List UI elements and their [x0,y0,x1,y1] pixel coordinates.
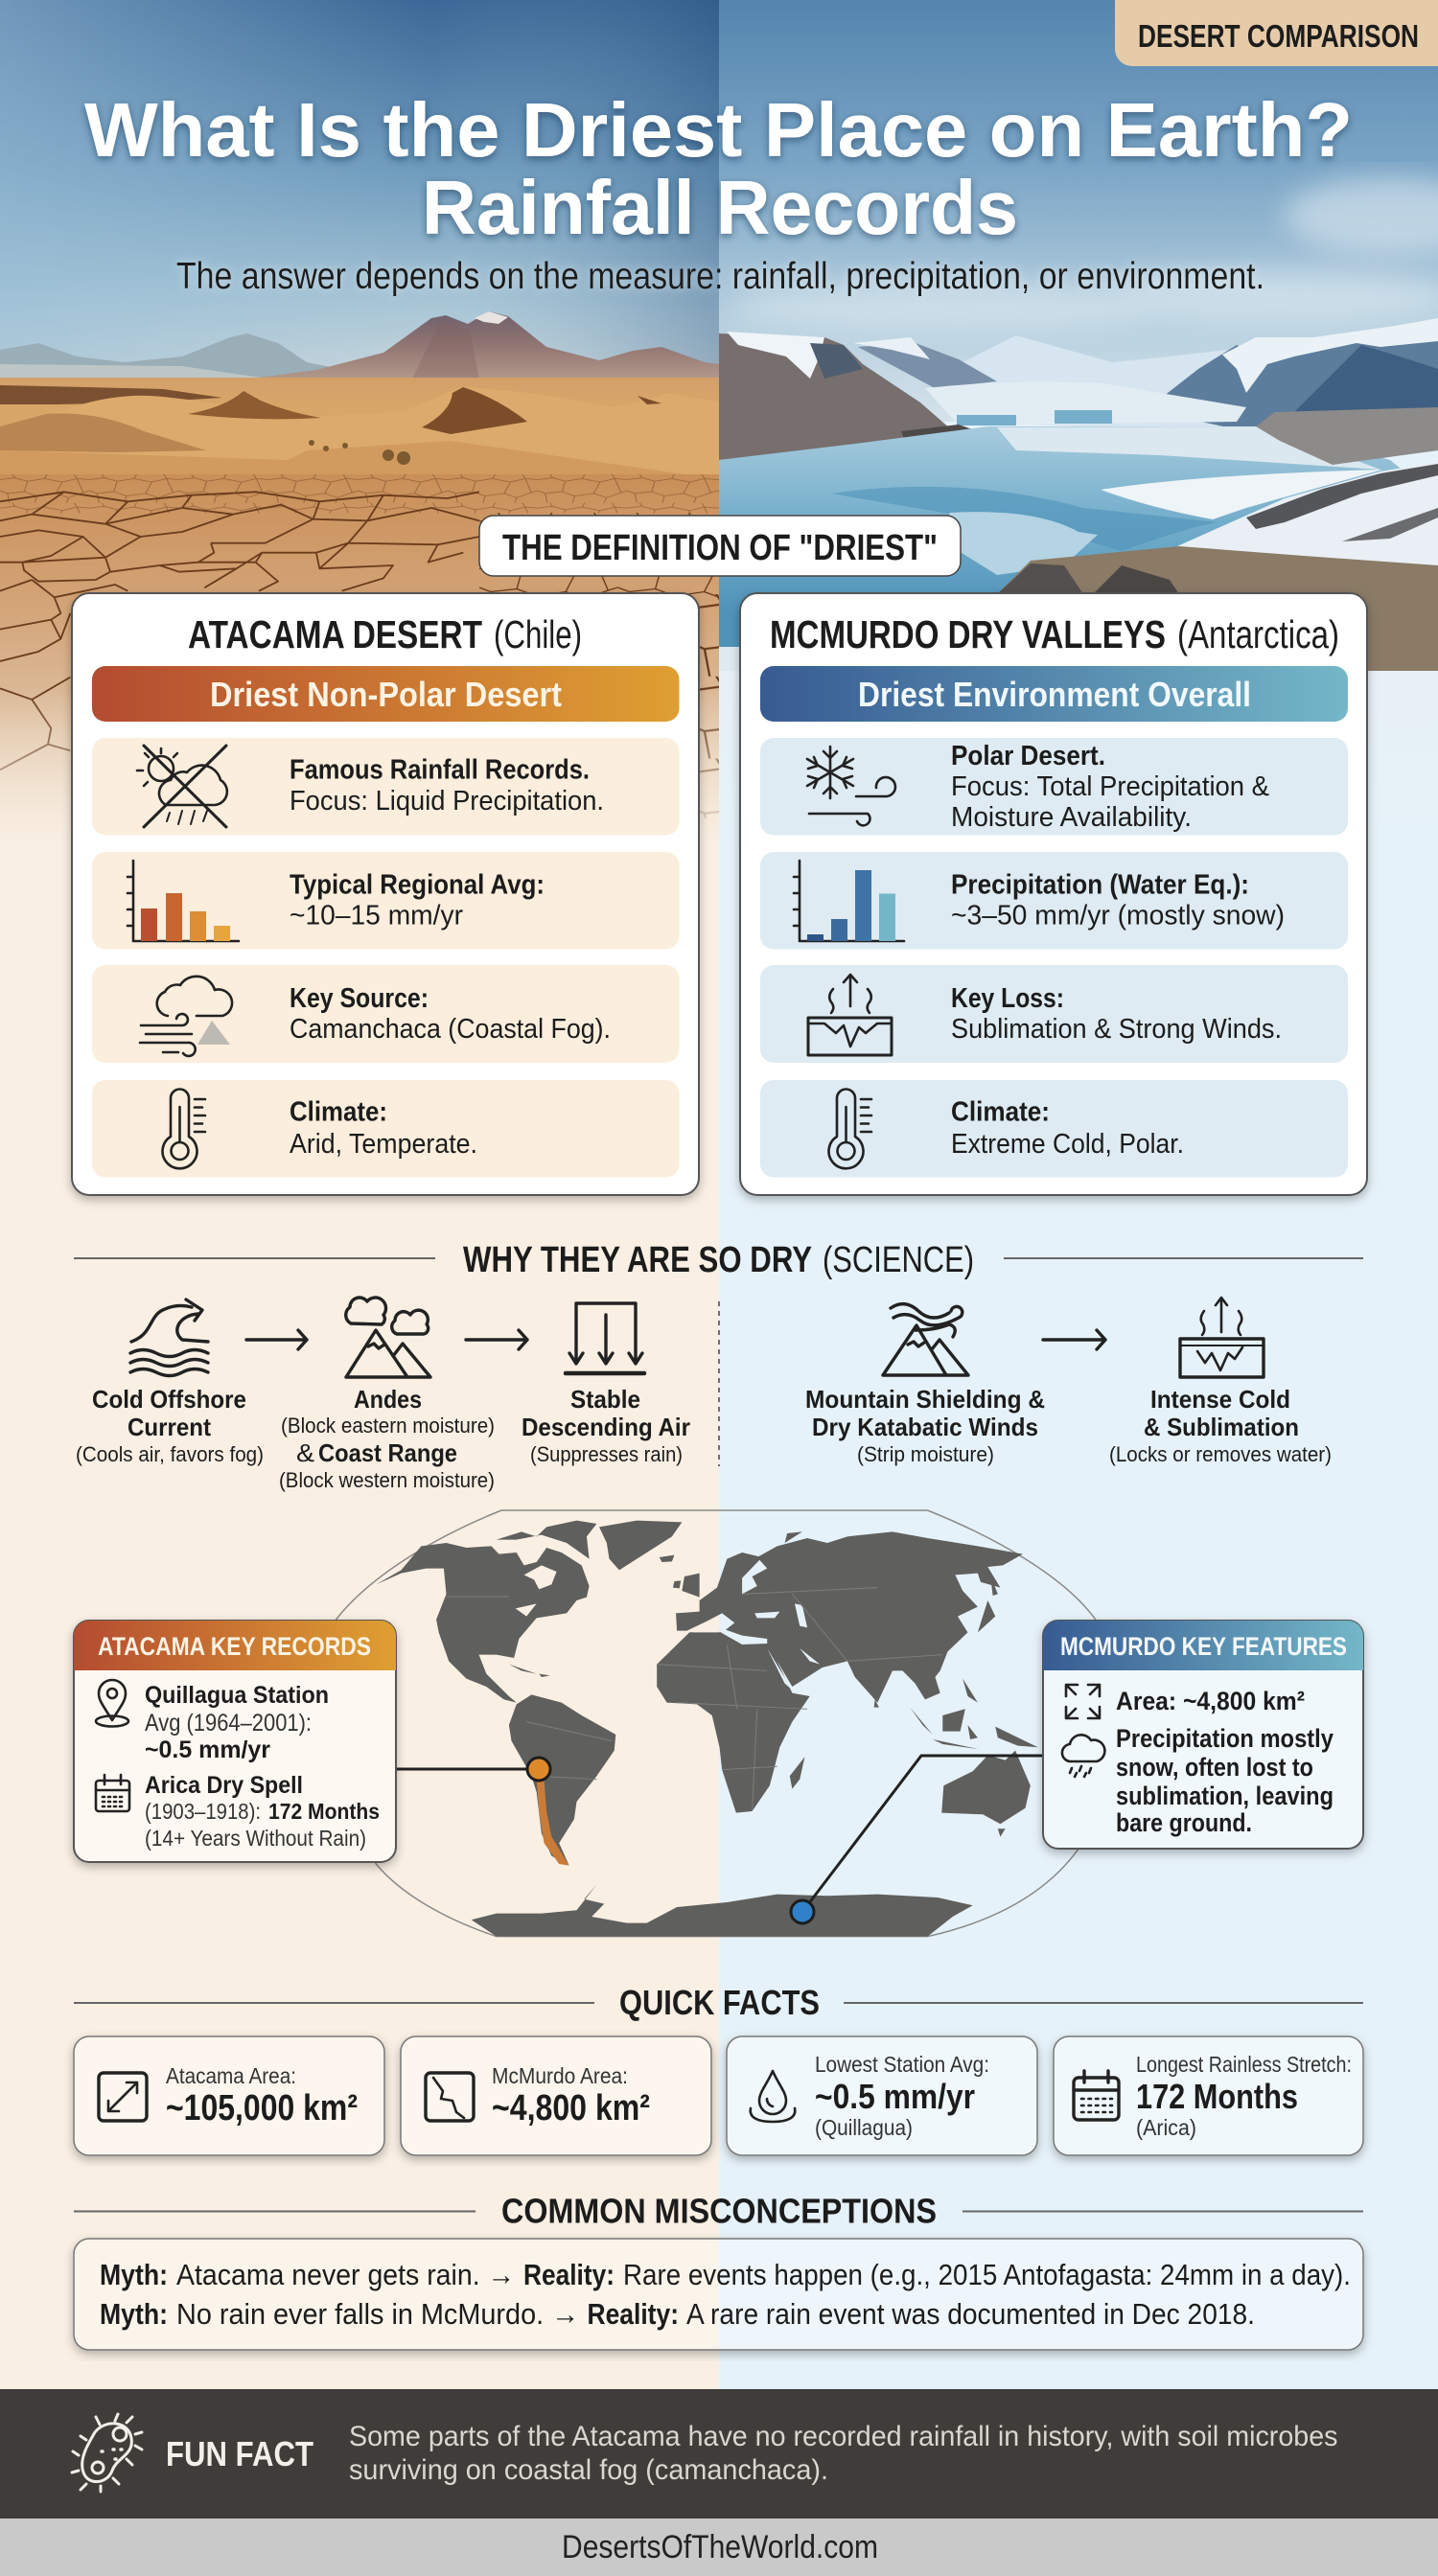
text: fun fact: Some parts of the Atacama have no recorded rainfall in history, with soil microbes [349,2421,1338,2452]
text: Quillagua station: Avg (1964–2001): [145,1710,312,1736]
icon: thermometer polar [828,1089,871,1168]
band: fun fact [0,2389,1438,2518]
row: key loss [760,965,1348,1063]
text: polar desert: Moisture Availability. [951,802,1192,833]
section heading: common misconceptions: COMMON MISCONCEPTIONS [501,2191,937,2231]
row: key source [92,965,679,1063]
step: cold offshore current: Current [128,1413,211,1441]
text: regional average: Typical Regional Avg: [290,870,545,901]
step: stable descending air: Stable [570,1385,640,1414]
row: rainfall records [92,738,679,836]
footer: DesertsOfTheWorld.com [562,2529,878,2565]
myth one: Atacama never gets rain. → [176,2258,515,2291]
text: lowest station average [815,2052,989,2140]
text: regional average: ~10–15 mm/yr [290,901,463,932]
step: andes and coast range: (Block western moisture) [279,1468,495,1492]
step: andes and coast range: & [296,1438,314,1467]
step: andes and coast range: Coast Range [318,1438,457,1467]
text: key source: Key Source: [290,983,429,1014]
panel: misconceptions [74,2239,1363,2350]
text: Atacama area [166,2063,358,2128]
step: mountain shielding: Dry Katabatic Winds [812,1413,1038,1441]
icon: bar chart cool [794,861,904,941]
section heading: why they are so dry: (SCIENCE) [823,1240,974,1280]
text: precipitation: Precipitation (Water Eq.): [951,870,1249,901]
panel: McMurdo Dry Valleys [740,593,1367,1195]
myth two: Reality: [587,2297,679,2331]
text: climate polar: Extreme Cold, Polar. [951,1129,1184,1160]
arrow [246,1330,307,1349]
text: rainfall records: Focus: Liquid Precipitation. [290,786,604,816]
icon: expand arrows [1066,1685,1100,1718]
panel heading: McMurdo: (Antarctica) [1177,612,1339,656]
text: rainfall records: Famous Rainfall Records. [290,755,590,786]
text: precipitation note [1116,1724,1334,1837]
highlight: Chile strip [537,1780,569,1866]
myth one: Reality: [523,2258,615,2291]
tag: desert comparison [1115,0,1438,66]
stat card: lowest station average [727,2036,1037,2155]
text: longest rainless stretch: Longest Rainless Stretch: [1136,2052,1352,2077]
text: polar desert [951,741,1269,833]
connector: Atacama marker [396,1758,550,1781]
heading pill: the definition of driest [479,516,961,576]
text: key source [290,983,611,1045]
text: Arica dry spell [145,1772,380,1851]
text: key loss: Key Loss: [951,983,1064,1014]
myth two: Myth: [100,2297,168,2331]
stat card: longest rainless stretch [1054,2036,1363,2155]
text: polar desert: Focus: Total Precipitation & [951,771,1269,802]
text: Quillagua station: Quillagua Station [145,1682,329,1709]
callout: Atacama key records [74,1621,396,1862]
myth one: Rare events happen (e.g., 2015 Antofagasta: 24mm in a day). [623,2258,1351,2291]
step: andes and coast range: (Block eastern moisture) [281,1414,495,1438]
text: climate [290,1096,477,1160]
icon: calendar [1074,2071,1119,2120]
section heading: why they are so dry [74,1240,1363,1280]
step: cold offshore current: (Cools air, favors fog) [76,1442,264,1466]
section heading: quick facts: QUICK FACTS [619,1983,820,2022]
footer [0,2518,1438,2576]
title: What Is the Driest Place on Earth? [84,87,1353,172]
icon: mountain and katabatic winds [883,1304,968,1375]
banner: driest non-polar desert: Driest Non-Polar Desert [210,675,562,714]
icon: microbe [72,2414,142,2492]
step: stable descending air [522,1385,690,1466]
arrow [1043,1330,1105,1349]
text: fun fact [349,2421,1338,2486]
icon: bar chart warm [128,861,239,941]
icon: wave [130,1300,208,1376]
step: intense cold: (Locks or removes water) [1109,1442,1332,1466]
stat card: McMurdo area [401,2036,711,2155]
text: lowest station average: (Quillagua) [815,2115,913,2140]
text: Quillagua station: ~0.5 mm/yr [145,1736,270,1763]
flow: McMurdo science steps [805,1298,1332,1466]
text: precipitation note: sublimation, leaving [1116,1782,1334,1810]
text: climate polar [951,1096,1184,1160]
step: cold offshore current [76,1385,264,1466]
panel heading: Atacama: (Chile) [494,612,582,656]
icon: descending air [566,1303,644,1373]
banner: driest environment overall: Driest Environment Overall [858,675,1251,714]
text: key loss [951,983,1282,1045]
label: fun fact: FUN FACT [166,2434,313,2473]
stat card: Atacama area [74,2036,384,2155]
banner: driest environment overall [760,666,1348,722]
text: regional average [290,870,545,932]
row: precipitation [760,852,1348,949]
text: polar desert: Polar Desert. [951,741,1105,771]
callout header: ATACAMA KEY RECORDS [98,1632,371,1661]
callout header [74,1621,396,1670]
text: precipitation: ~3–50 mm/yr (mostly snow) [951,901,1285,932]
step: intense cold: & Sublimation [1144,1413,1299,1441]
row: regional average [92,852,679,949]
subtitle: The answer depends on the measure: rainfall, precipitation, or environment. [176,256,1264,297]
world map [330,1510,1111,1937]
title: Rainfall Records [422,165,1018,250]
section heading: why they are so dry: WHY THEY ARE SO DRY [463,1240,812,1280]
text: Arica dry spell: Arica Dry Spell [145,1772,303,1799]
text: longest rainless stretch: (Arica) [1136,2115,1196,2140]
text: Quillagua station [145,1682,329,1763]
title [84,87,1353,250]
icon: location pin [96,1680,128,1727]
icon: mountains and clouds [346,1298,430,1377]
row: climate polar [760,1080,1348,1177]
text: Atacama area: Atacama Area: [166,2063,296,2088]
icon: calendar [96,1775,129,1811]
text: key source: Camanchaca (Coastal Fog). [290,1014,611,1045]
banner: driest non-polar desert [92,666,679,722]
icon: crossed-out rain cloud [137,746,227,827]
myth one [100,2258,1351,2291]
step: stable descending air: (Suppresses rain) [530,1442,683,1466]
step: cold offshore current: Cold Offshore [92,1385,246,1414]
step: stable descending air: Descending Air [522,1413,690,1441]
text: precipitation note: snow, often lost to [1116,1753,1313,1782]
step: mountain shielding [805,1385,1045,1466]
text: Arica dry spell: (14+ Years Without Rain) [145,1826,366,1851]
icon: fog cloud and wind [140,977,232,1056]
text: Arica dry spell: 172 Months [268,1799,380,1824]
step: andes and coast range [279,1385,495,1492]
text: climate: Arid, Temperate. [290,1129,477,1160]
arrow [466,1330,527,1349]
heading pill: the definition of driest: THE DEFINITION OF "DRIEST" [502,528,938,568]
text: lowest station average: ~0.5 mm/yr [815,2077,975,2116]
myth two: A rare rain event was documented in Dec 2018. [686,2297,1255,2331]
step: intense cold [1109,1385,1332,1466]
step: intense cold: Intense Cold [1150,1385,1290,1414]
text: McMurdo area: McMurdo Area: [492,2063,628,2088]
text: longest rainless stretch: 172 Months [1136,2077,1298,2116]
text: fun fact: surviving on coastal fog (camanchaca). [349,2454,828,2486]
icon: cold and sublimation [1180,1298,1264,1377]
panel heading: McMurdo: MCMURDO DRY VALLEYS [770,612,1166,656]
row: climate [92,1080,679,1177]
text: precipitation [951,870,1285,932]
callout header: MCMURDO KEY FEATURES [1060,1632,1347,1661]
icon: water drop [751,2071,795,2122]
myth two [100,2297,1255,2331]
icon: area with crack [426,2073,474,2121]
text: precipitation note: bare ground. [1116,1808,1252,1837]
callout: McMurdo key features [1043,1621,1363,1849]
icon: sublimation [808,975,892,1055]
text: lowest station average: Lowest Station Avg: [815,2052,989,2077]
step: mountain shielding: (Strip moisture) [857,1442,994,1466]
callout header [1043,1621,1363,1670]
icon: snowflake and wind [807,747,895,825]
text: McMurdo area [492,2063,650,2128]
panel: Atacama Desert [72,593,699,1195]
hero image: McMurdo Dry Valleys [719,0,1438,843]
text: precipitation note: Precipitation mostly [1116,1724,1334,1753]
text: Atacama area: ~105,000 km² [166,2088,358,2128]
row: polar desert [760,738,1348,836]
flow: Atacama science steps [76,1298,690,1492]
step: mountain shielding: Mountain Shielding & [805,1385,1045,1414]
text: climate: Climate: [290,1096,387,1127]
connector: McMurdo marker [791,1756,1043,1923]
text: rainfall records [290,755,604,816]
text: key loss: Sublimation & Strong Winds. [951,1014,1282,1045]
text: McMurdo area: ~4,800 km² [492,2088,650,2128]
icon: snow cloud [1062,1735,1104,1777]
myth two: No rain ever falls in McMurdo. → [176,2297,579,2331]
myth one: Myth: [100,2258,168,2291]
icon: thermometer [163,1089,205,1168]
text: longest rainless stretch [1136,2052,1352,2140]
text: Arica dry spell: (1903–1918): [145,1799,261,1824]
icon: area arrows [99,2073,147,2121]
text: climate polar: Climate: [951,1096,1050,1127]
hero image: Atacama desert [0,0,725,848]
panel heading: Atacama: ATACAMA DESERT [188,612,482,656]
text: area: Area: ~4,800 km² [1116,1687,1305,1715]
step: andes and coast range: Andes [354,1385,422,1414]
